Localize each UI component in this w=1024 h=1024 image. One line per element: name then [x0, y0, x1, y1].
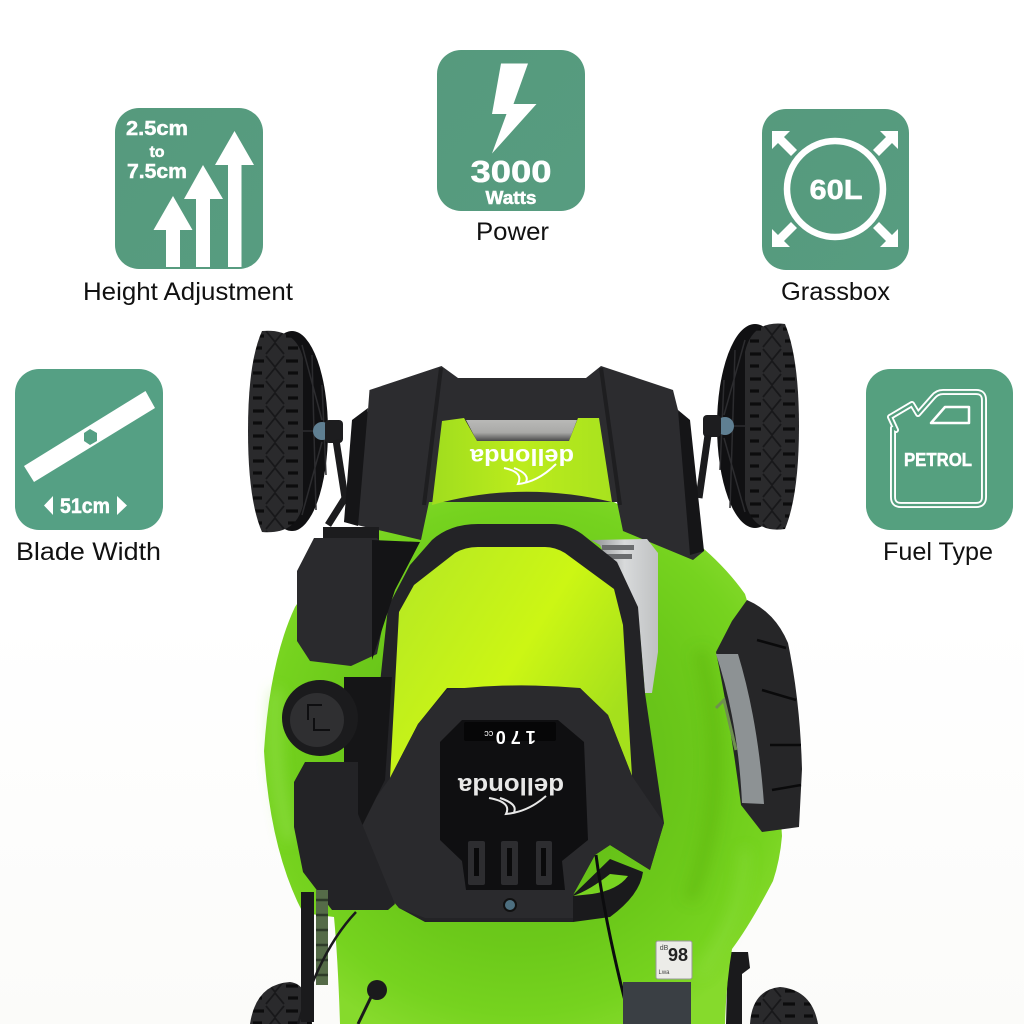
- mulch lever: [716, 600, 802, 832]
- noise label: Lwa: [658, 970, 670, 976]
- engine cover outer: [358, 524, 664, 922]
- brand logo lower: [457, 772, 564, 814]
- lawnmower photo illustration: [248, 324, 818, 1024]
- tile: power: [437, 50, 585, 211]
- capacity value: 60L: [810, 174, 862, 205]
- noise label: dB: [660, 945, 669, 952]
- tile: fuel type: [866, 369, 1013, 530]
- cable loop: [573, 859, 643, 922]
- icon: expand arrows: [772, 131, 898, 247]
- label: grassbox: Grassbox: [781, 278, 891, 306]
- power unit: Watts: [486, 188, 536, 208]
- tile: blade width: [15, 369, 163, 530]
- fuel text: PETROL: [904, 450, 972, 470]
- label: height adjustment: Height Adjustment: [83, 278, 293, 306]
- fuel cap housing: [344, 677, 392, 830]
- icon: lightning bolt: [492, 64, 536, 154]
- brand logo lower: dellonda: [457, 772, 564, 799]
- noise label: 98: [668, 945, 688, 965]
- icon: capacity circle: [787, 141, 883, 237]
- power value: 3000: [470, 154, 552, 189]
- height range text: 2.5cm: [126, 118, 188, 140]
- height range text: to: [149, 144, 165, 161]
- tile: grassbox: [762, 109, 909, 270]
- label: blade width: Blade Width: [16, 538, 161, 566]
- left cable: [298, 912, 356, 1024]
- engine vents: [468, 841, 552, 885]
- label: fuel type: Fuel Type: [883, 538, 993, 566]
- brand logo upper: dellonda: [470, 444, 574, 470]
- screw: [504, 899, 516, 911]
- left rear wheel: [248, 331, 345, 532]
- fuel tank: [294, 762, 395, 910]
- grass chute handle: [344, 366, 704, 560]
- icon: blade: [24, 391, 155, 482]
- lime engine cover: [390, 547, 632, 778]
- air filter box: [297, 527, 420, 666]
- tile: height adjustment: [115, 108, 263, 269]
- bracket slots: [602, 545, 634, 559]
- engine head: [358, 685, 664, 918]
- engine size badge: [464, 722, 556, 747]
- black control plate: [440, 720, 588, 890]
- blade width value: 51cm: [60, 495, 110, 518]
- fuel cap knob: [282, 680, 358, 756]
- rating label: [623, 982, 691, 1024]
- height range text: [126, 118, 188, 183]
- lime nose panel: [432, 418, 612, 505]
- height range text: 7.5cm: [127, 161, 187, 183]
- green gap: [573, 874, 628, 896]
- icon: blade hole: [84, 429, 97, 445]
- icon: three rising arrows: [154, 131, 254, 267]
- spring and post: [301, 890, 328, 1022]
- icon: jerry can: [890, 392, 984, 505]
- brand logo upper: [470, 444, 574, 484]
- silver bracket: [591, 539, 658, 693]
- noise label: [656, 941, 692, 979]
- mower deck: [264, 500, 782, 1024]
- engine size badge: 1 7 0 cc: [484, 727, 536, 747]
- deck hole: [358, 980, 387, 1024]
- icon: width arrows: [44, 496, 127, 515]
- grey handle window: [466, 420, 577, 441]
- right rear wheel: [699, 324, 799, 530]
- deck highlights: [275, 650, 745, 975]
- label: power: Power: [476, 218, 549, 246]
- starter cord: [596, 855, 631, 1024]
- front wheels: [250, 952, 818, 1024]
